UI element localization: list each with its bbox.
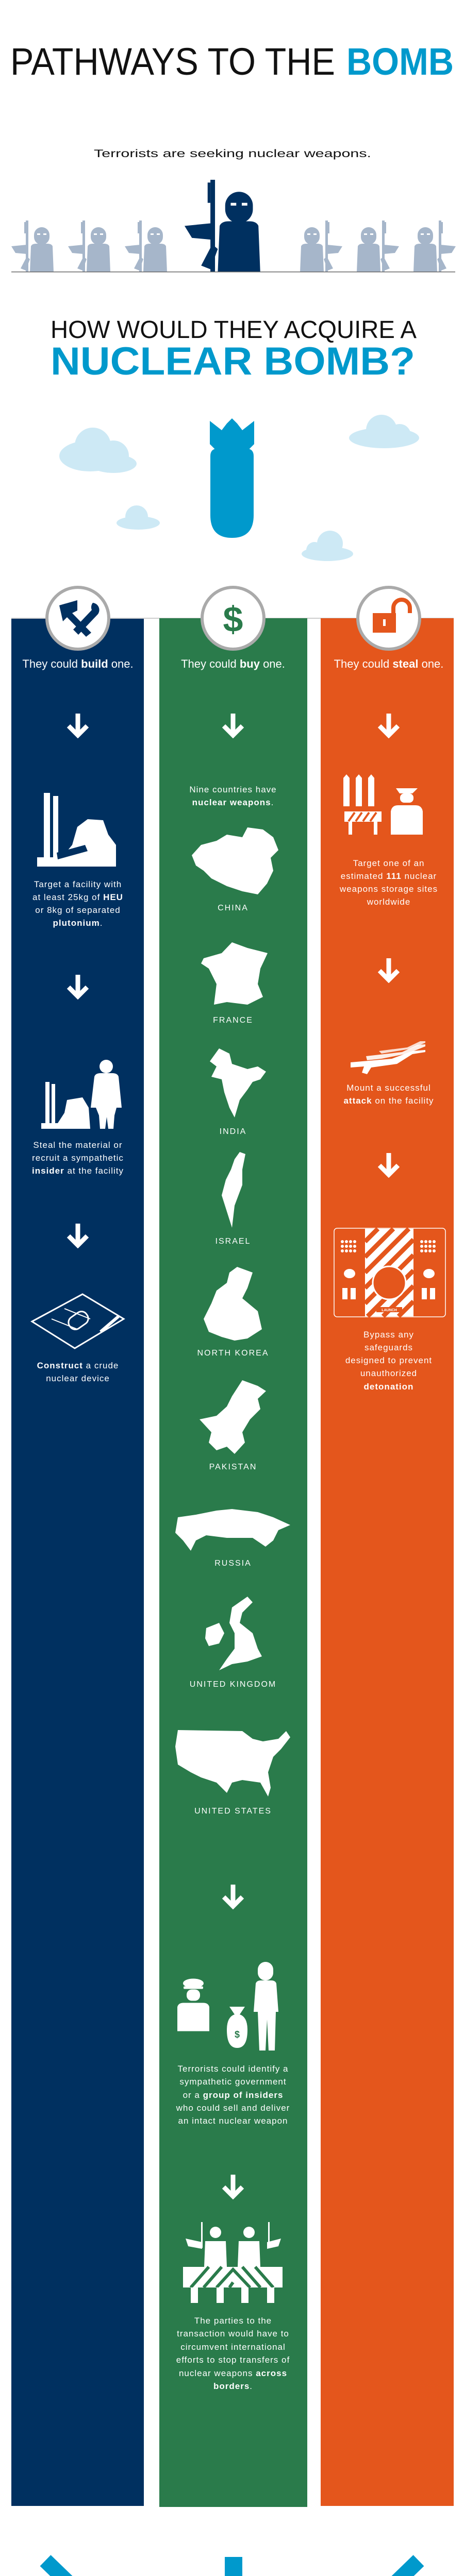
converging arrows (45, 2557, 419, 2576)
map: France (201, 942, 268, 1025)
text: mount attack: Mount a successful (346, 1083, 431, 1093)
text: bypass safeguards (345, 1330, 432, 1392)
icon: missiles and guard (343, 774, 423, 835)
icon: hammer and wrench circle (47, 587, 109, 649)
arrow (379, 1153, 398, 1175)
text: target storage sites: worldwide (367, 897, 410, 907)
icon: launch control panel (334, 1228, 445, 1317)
icon: dollar circle: $ (223, 599, 243, 639)
panel: buy column (159, 587, 307, 2507)
text: target facility: Target a facility with (34, 879, 122, 889)
arrow (69, 975, 87, 996)
text: steal or recruit insider (32, 1140, 124, 1176)
text: circumvent efforts (176, 2316, 290, 2391)
map: United Kingdom (190, 1597, 276, 1689)
text: construct device: Construct a crude (37, 1361, 119, 1370)
text: target facility (32, 879, 123, 928)
map: Pakistan: PAKISTAN (209, 1463, 257, 1471)
text: target storage sites (339, 858, 438, 907)
panel: build column (11, 587, 454, 2506)
map: Pakistan (200, 1380, 266, 1471)
icon: launch control panel: LAUNCH (382, 1309, 397, 1312)
map: Israel (216, 1152, 251, 1246)
map: China (192, 827, 278, 912)
text: identify sympathetic government (176, 2064, 290, 2126)
map: United States (175, 1730, 290, 1816)
text: bypass safeguards: unauthorized (360, 1368, 417, 1378)
icon: factory (37, 793, 116, 867)
text: bypass safeguards: designed to prevent (345, 1355, 432, 1365)
arrow (379, 714, 398, 735)
heading: how would they acquire: HOW WOULD THEY ACQUIRE A (51, 316, 417, 344)
text: target facility: plutonium. (53, 918, 103, 928)
icon: falling bomb (210, 418, 254, 538)
text: bypass safeguards: safeguards (364, 1343, 413, 1352)
icon: rifles (351, 1041, 425, 1074)
text: nine countries (189, 785, 277, 807)
text: target facility: at least 25kg of HEU (32, 892, 123, 902)
text: build one: They could build one. (22, 657, 134, 670)
text: bypass safeguards: Bypass any (363, 1330, 414, 1340)
text: steal or recruit insider: insider at the facility (32, 1166, 124, 1176)
map: India: INDIA (220, 1127, 246, 1136)
icon: factory and insider (41, 1060, 122, 1129)
title: BOMB (346, 40, 454, 83)
text: circumvent efforts: nuclear weapons across (179, 2368, 287, 2378)
text: target storage sites: Target one of an (353, 858, 424, 868)
map: France: FRANCE (213, 1016, 253, 1025)
arrow (69, 714, 87, 735)
heading: how would they acquire: NUCLEAR BOMB? (51, 340, 415, 383)
map: United States: UNITED STATES (194, 1807, 272, 1816)
arrow (379, 958, 398, 980)
icon: open padlock circle (358, 587, 420, 649)
subtitle: Terrorists are seeking nuclear weapons. (94, 148, 371, 160)
text: steal or recruit insider: Steal the material or (33, 1140, 123, 1150)
text: circumvent efforts: The parties to the (194, 2316, 272, 2326)
text: steal one: They could steal one. (334, 657, 443, 670)
text: construct device: nuclear device (46, 1374, 110, 1383)
arrow (224, 714, 242, 735)
heading: how would they acquire (51, 316, 417, 383)
icon: dollar circle (202, 587, 264, 649)
icon: soldiers at border (183, 2222, 283, 2303)
panel: steal column (321, 587, 454, 2506)
text: nine countries: Nine countries have (189, 785, 277, 794)
text: mount attack: attack on the facility (343, 1096, 434, 1106)
icon: exchange between official and terrorist: $ (235, 2029, 240, 2040)
map: Russia: RUSSIA (214, 1559, 252, 1568)
text: construct device (37, 1361, 119, 1383)
text: buy one: They could buy one. (181, 657, 285, 670)
map: North Korea (197, 1267, 269, 1358)
text: identify sympathetic government: an intact nuclear weapon (178, 2116, 288, 2126)
text: target storage sites: weapons storage sites (339, 884, 438, 894)
map: China: CHINA (218, 904, 248, 912)
text: bypass safeguards: detonation (364, 1382, 413, 1392)
icon: blueprint (32, 1294, 124, 1348)
arrow (224, 2175, 242, 2196)
text: steal or recruit insider: recruit a sympathetic (32, 1153, 124, 1163)
text: mount attack (343, 1083, 434, 1106)
map: Israel: ISRAEL (216, 1237, 251, 1246)
arrow (69, 1224, 87, 1245)
text: identify sympathetic government: or a group of insiders (183, 2090, 283, 2100)
text: identify sympathetic government: sympathetic government (179, 2077, 287, 2087)
text: circumvent efforts: efforts to stop transfers of (176, 2355, 290, 2365)
arrow (224, 1885, 242, 1906)
text: identify sympathetic government: who could sell and deliver (176, 2103, 290, 2113)
map: Russia (175, 1509, 290, 1568)
icon: exchange between official and terrorist (177, 1962, 278, 2050)
clouds (59, 415, 419, 561)
text: target facility: or 8kg of separated (35, 905, 121, 915)
text: circumvent efforts: borders. (213, 2381, 253, 2391)
text: circumvent efforts: circumvent international (180, 2342, 286, 2352)
text: target storage sites: estimated 111 nuclear (341, 871, 437, 881)
text: circumvent efforts: transaction would have to (177, 2329, 289, 2338)
map: United Kingdom: UNITED KINGDOM (190, 1680, 276, 1689)
text: nine countries: nuclear weapons. (192, 798, 274, 807)
map: India (210, 1048, 266, 1136)
terrorist row illustration (11, 180, 456, 272)
title: PATHWAYS TO THE (10, 40, 335, 83)
text: identify sympathetic government: Terrorists could identify a (177, 2064, 289, 2074)
map: North Korea: NORTH KOREA (197, 1349, 269, 1358)
